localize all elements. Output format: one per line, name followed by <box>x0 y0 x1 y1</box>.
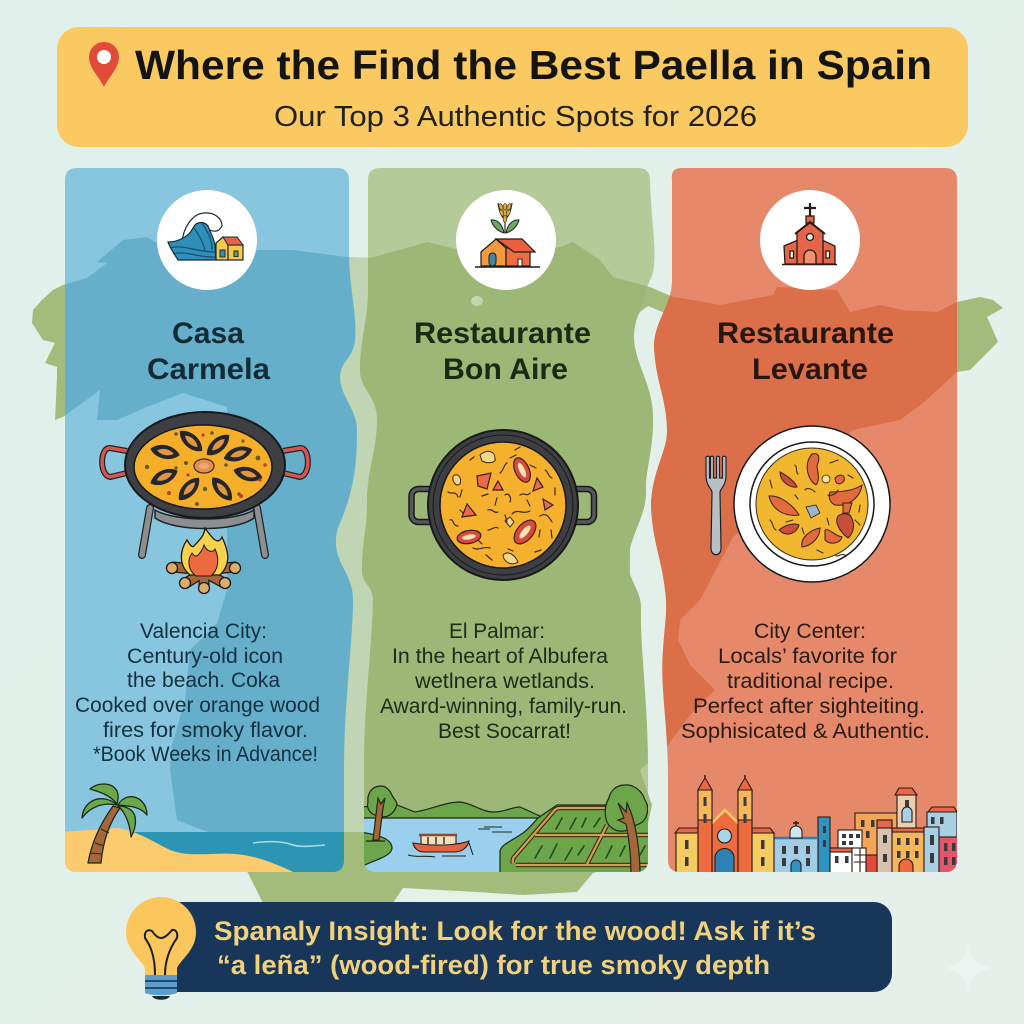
body text: Century-old icon <box>127 645 283 668</box>
icon: rice fields <box>513 808 655 865</box>
body text <box>681 620 930 743</box>
body text: Locals’ favorite for <box>718 645 897 668</box>
heading <box>717 317 894 386</box>
body text: City Center: <box>754 620 866 643</box>
heading: Restaurante <box>717 317 894 350</box>
heading: Restaurante <box>414 317 591 350</box>
body text: In the heart of Albufera <box>392 645 608 668</box>
panel: Restaurante Bon Aire <box>360 168 654 872</box>
map of Spain silhouette <box>32 237 1003 903</box>
body text: fires for smoky flavor. <box>103 719 308 742</box>
heading: Carmela <box>147 353 270 386</box>
heading <box>414 317 591 386</box>
heading <box>147 317 270 386</box>
body text: Perfect after sighteiting. <box>693 695 925 718</box>
icon: sparkle <box>945 945 992 992</box>
title: Where the Find the Best Paella in Spain <box>135 42 932 88</box>
icon: palm tree <box>82 784 147 863</box>
paella pan over fire <box>102 412 308 594</box>
title banner <box>57 27 968 147</box>
heading: Bon Aire <box>443 353 568 386</box>
body text: wetlnera wetlands. <box>414 670 595 693</box>
wetlands scene <box>360 785 655 874</box>
icon: left tree <box>366 786 397 841</box>
icon: wave and house <box>157 190 257 290</box>
icon: farmhouse and rice <box>456 190 556 290</box>
body text: Valencia City: <box>140 620 267 643</box>
icon: location pin <box>89 42 119 87</box>
body text: Best Socarrat! <box>438 720 571 743</box>
body text: Cooked over orange wood <box>75 694 320 717</box>
icon: campfire <box>166 528 240 594</box>
body text: traditional recipe. <box>727 670 894 693</box>
body text <box>75 620 320 766</box>
body text: the beach. Coka <box>127 669 280 692</box>
body text <box>380 620 627 743</box>
body text: El Palmar: <box>449 620 545 643</box>
icon: fork <box>706 456 726 555</box>
body text: Award-winning, family-run. <box>380 695 627 718</box>
icon: light bulb <box>126 897 196 1000</box>
plate of paella <box>734 426 890 582</box>
callout: insight banner <box>126 897 892 1000</box>
icon: boat <box>408 835 473 857</box>
heading: Levante <box>752 353 868 386</box>
beach scene <box>60 784 347 875</box>
insight text <box>214 916 816 980</box>
body text: *Book Weeks in Advance! <box>93 743 318 766</box>
insight text: “a leña” (wood-fired) for true smoky depth <box>217 950 770 980</box>
icon: right tree <box>605 785 648 874</box>
panel: Restaurante Levante <box>651 168 957 872</box>
icon: church <box>760 190 860 290</box>
paella pan <box>412 430 594 580</box>
city skyline <box>675 775 959 873</box>
insight text: Spanaly Insight: Look for the wood! Ask if it’s <box>214 916 816 946</box>
subtitle: Our Top 3 Authentic Spots for 2026 <box>274 101 757 133</box>
body text: Sophisicated & Authentic. <box>681 720 930 743</box>
panel: Casa Carmela <box>65 168 357 872</box>
heading: Casa <box>172 317 244 350</box>
